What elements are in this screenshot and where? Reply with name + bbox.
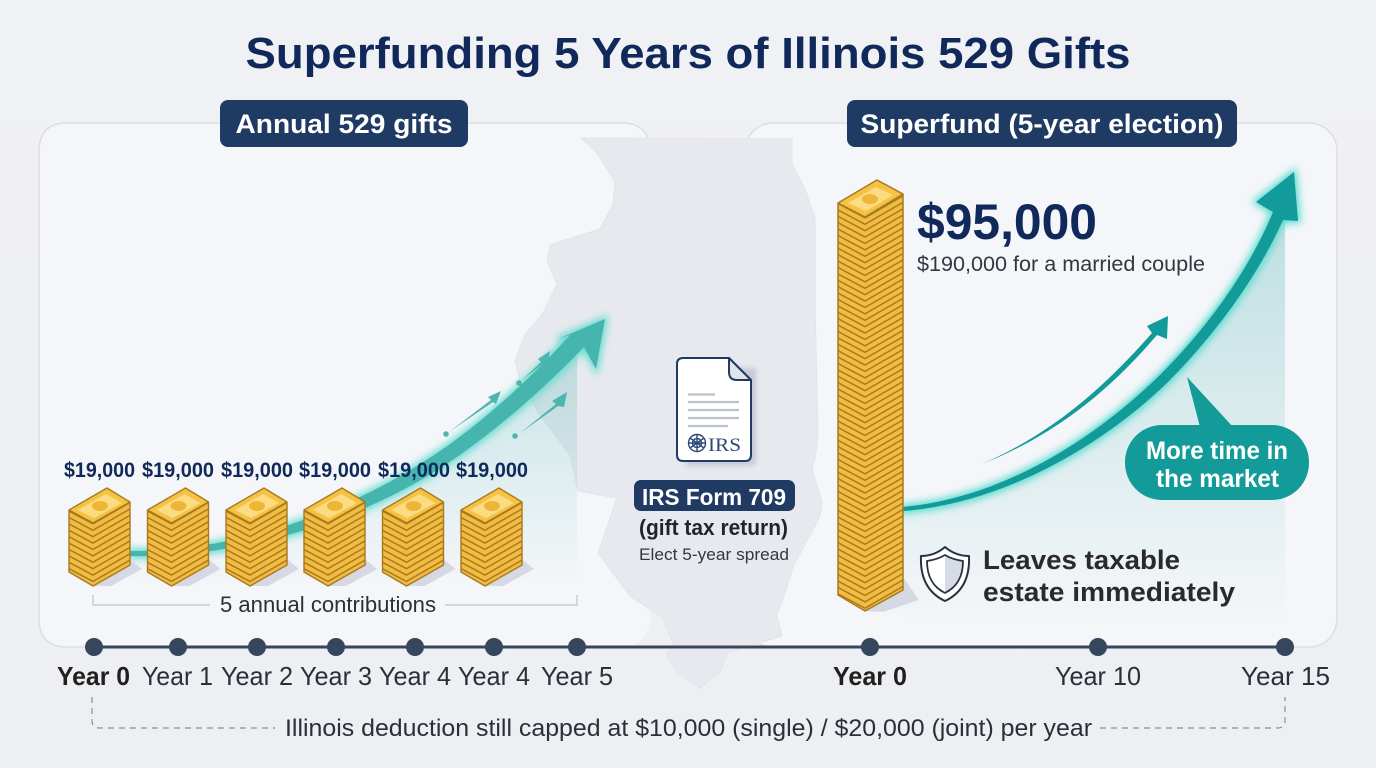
- timeline labels: Year 5: [541, 661, 613, 691]
- IRS form icon: IRS: [708, 435, 741, 456]
- stack: superfund lump sum: [838, 180, 919, 612]
- callout: more time in the market: [1125, 377, 1309, 500]
- amount labels: $19,000: [64, 459, 135, 482]
- amount labels: $19,000: [378, 459, 450, 482]
- timeline labels: Year 2: [221, 661, 293, 691]
- panel: superfund: [745, 123, 1337, 647]
- callout: more time in the market: the market: [1156, 465, 1280, 493]
- timeline labels: Year 4: [379, 661, 451, 691]
- callout: more time in the market: More time in: [1146, 437, 1288, 465]
- amount: $95,000: [917, 194, 1205, 276]
- footnote: Illinois deduction cap: [92, 697, 1285, 742]
- timeline labels: Year 0: [833, 661, 907, 691]
- stack: year 5: [461, 488, 534, 586]
- IRS form label: (gift tax return): [639, 515, 788, 540]
- arrow: secondary growth curve: [982, 316, 1168, 464]
- stack: year 3: [304, 488, 377, 586]
- text: leaves taxable estate: [983, 545, 1235, 607]
- panel: annual gifts: [39, 123, 650, 647]
- arrow: main growth curve: [903, 172, 1298, 511]
- timeline labels: Year 3: [300, 661, 372, 691]
- title: Superfunding 5 Years of Illinois 529 Gifts: [246, 29, 1130, 78]
- timeline labels: Year 1: [142, 661, 213, 691]
- icon: shield: [921, 547, 969, 601]
- stack: year 1: [148, 488, 220, 586]
- timeline labels: Year 4: [458, 661, 530, 691]
- timeline: [57, 638, 1330, 691]
- amount labels: $19,000: [221, 459, 293, 482]
- IRS form label: [634, 480, 795, 564]
- amount labels: $19,000: [456, 459, 528, 482]
- growth chart: superfund: [903, 172, 1298, 630]
- text: leaves taxable estate: estate immediately: [983, 577, 1235, 607]
- growth chart: annual gifts: [130, 319, 605, 590]
- arrow: main growth curve: [130, 319, 605, 556]
- footnote: Illinois deduction cap: Illinois deduction still capped at $10,000 (single) / $20,000 (joint) per year: [285, 715, 1092, 742]
- timeline labels: Year 15: [1241, 661, 1330, 691]
- amount: $95,000: $95,000: [917, 194, 1097, 250]
- IRS form label: IRS Form 709: [642, 484, 786, 510]
- text: leaves taxable estate: Leaves taxable: [983, 545, 1180, 575]
- IRS form icon: [677, 358, 756, 466]
- IRS form label: Elect 5-year spread: [639, 545, 789, 564]
- IRS seal: [688, 434, 706, 452]
- amount labels: $19,000: [142, 459, 214, 482]
- heading: superfund: Superfund (5-year election): [860, 109, 1224, 139]
- stack: year 4: [382, 488, 456, 586]
- Illinois state silhouette: [515, 138, 822, 688]
- amount: $95,000: $190,000 for a married couple: [917, 253, 1205, 276]
- bracket: 5 annual contributions: [93, 592, 577, 617]
- amount labels: $19,000: [299, 459, 371, 482]
- stack: year 2: [226, 488, 299, 586]
- amount labels: [64, 459, 528, 482]
- timeline labels: [57, 661, 1330, 691]
- timeline labels: Year 10: [1055, 661, 1141, 691]
- bracket: 5 annual contributions: 5 annual contributions: [220, 592, 436, 617]
- heading: annual 529 gifts: Annual 529 gifts: [236, 109, 452, 139]
- timeline labels: Year 0: [57, 661, 130, 691]
- stack: year 0: [69, 488, 142, 586]
- heading: annual 529 gifts: [220, 100, 468, 147]
- heading: superfund: [847, 100, 1237, 147]
- small growth arrows: [443, 351, 567, 439]
